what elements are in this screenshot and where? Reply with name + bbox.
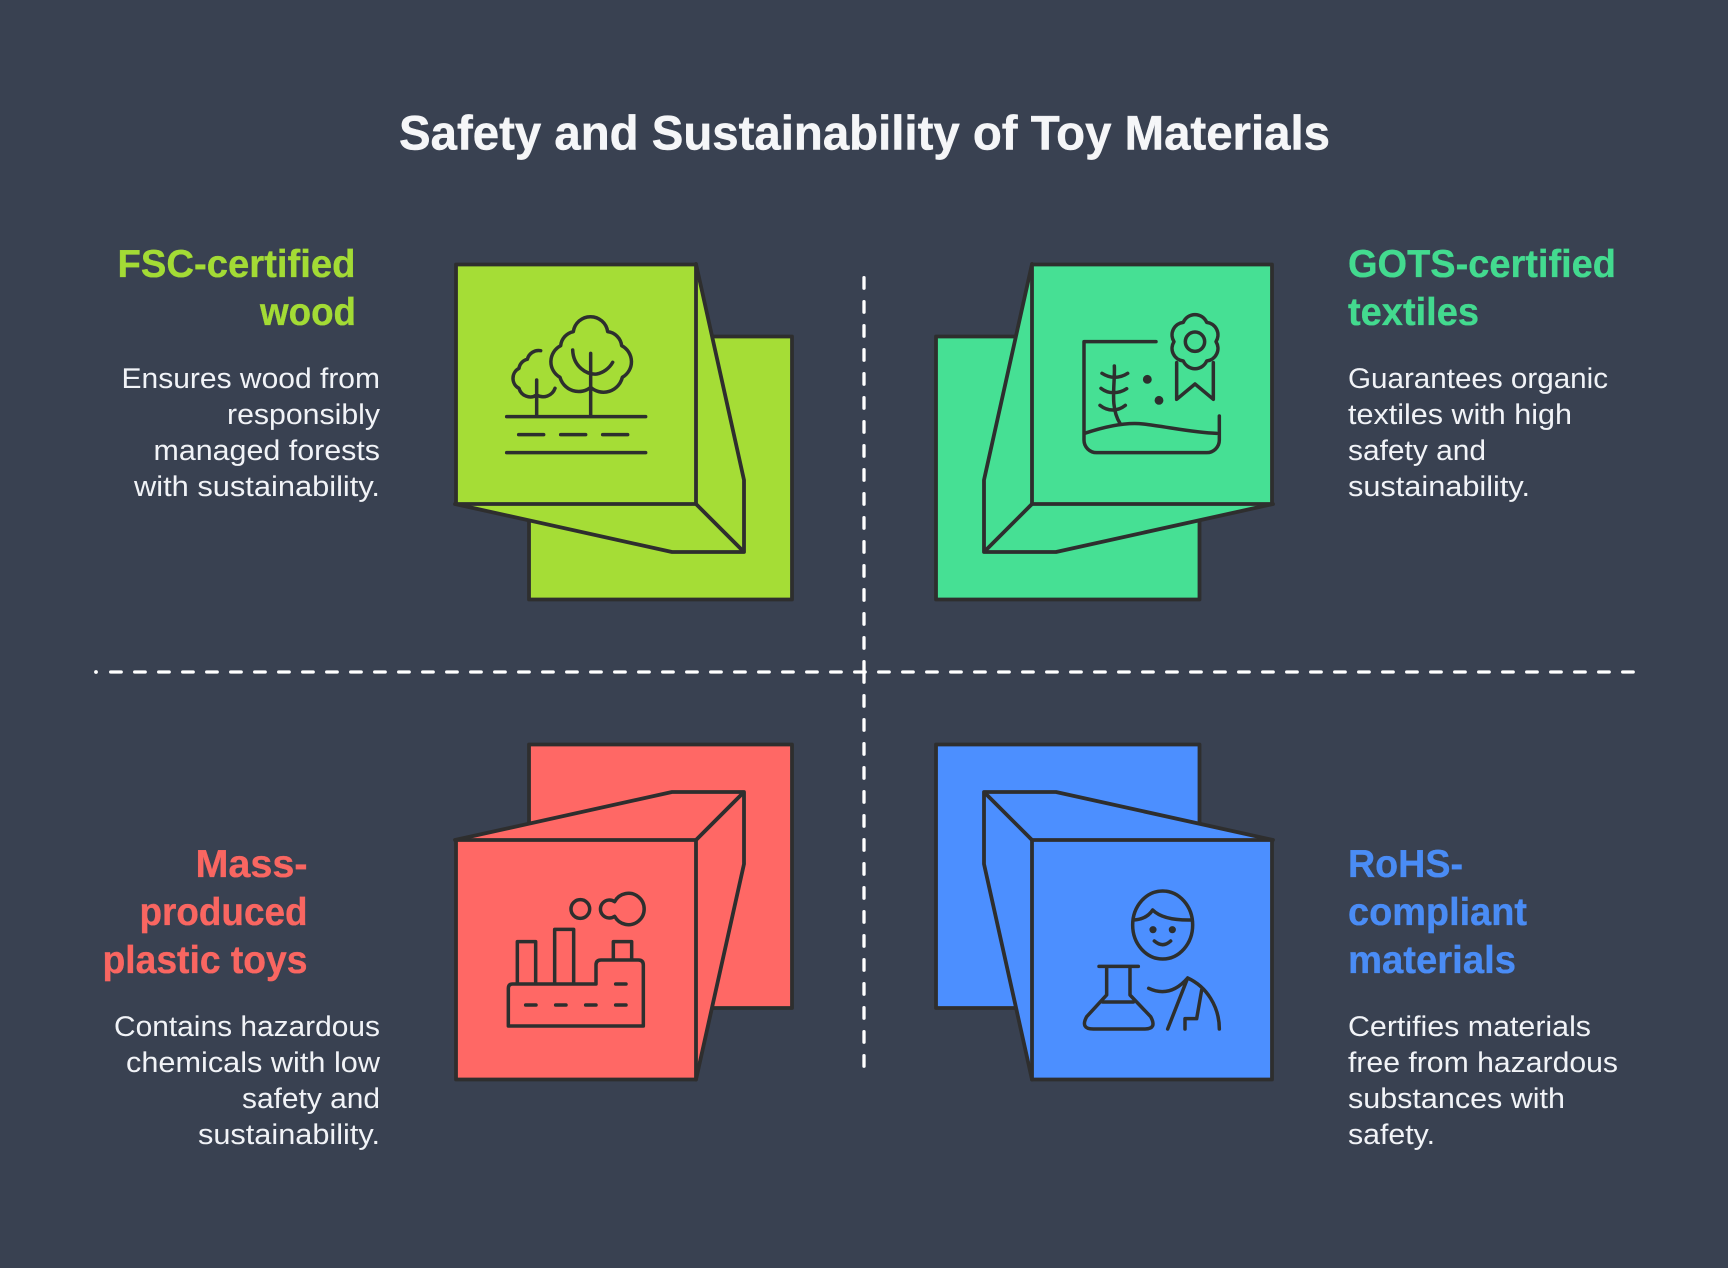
title: Safety and Sustainability of Toy Materials — [399, 106, 1330, 160]
description: RoHS-compliant materials: free from hazardous — [1348, 1047, 1618, 1079]
folded card: green — [936, 264, 1273, 600]
description: RoHS-compliant materials: safety. — [1348, 1119, 1435, 1151]
heading: GOTS-certified textiles: textiles — [1348, 291, 1479, 334]
description: Mass-produced plastic toys: safety and — [242, 1083, 380, 1115]
description: RoHS-compliant materials — [1348, 1011, 1618, 1151]
description: FSC-certified wood: Ensures wood from — [122, 363, 380, 395]
icon: trees on ground — [507, 317, 646, 453]
description: RoHS-compliant materials: substances with — [1348, 1083, 1565, 1115]
heading: Mass-produced plastic toys: produced — [140, 891, 308, 934]
description: Mass-produced plastic toys — [114, 1011, 380, 1151]
description: Mass-produced plastic toys: Contains hazardous — [114, 1011, 380, 1043]
heading: Mass-produced plastic toys — [102, 843, 308, 982]
panel: FSC-certified wood — [118, 243, 792, 600]
description: GOTS-certified textiles: sustainability. — [1348, 471, 1530, 503]
heading: Mass-produced plastic toys: plastic toys — [102, 939, 308, 982]
description: GOTS-certified textiles: safety and — [1348, 435, 1486, 467]
description: FSC-certified wood: responsibly — [227, 399, 381, 431]
icon: scientist with flask — [1084, 891, 1219, 1029]
panel: GOTS-certified textiles — [936, 243, 1616, 600]
folded card: red — [455, 744, 792, 1080]
panel: Mass-produced plastic toys — [102, 744, 792, 1151]
folded card: lime — [455, 264, 792, 600]
icon: factory with smoke — [508, 893, 644, 1026]
description: FSC-certified wood: managed forests — [154, 435, 380, 467]
icon: certified organic landscape — [1084, 315, 1219, 453]
description: FSC-certified wood — [122, 363, 381, 503]
description: RoHS-compliant materials: Certifies materials — [1348, 1011, 1591, 1043]
description: Mass-produced plastic toys: sustainability. — [198, 1119, 380, 1151]
description: FSC-certified wood: with sustainability. — [133, 471, 380, 503]
heading: RoHS-compliant materials — [1348, 843, 1527, 982]
heading: GOTS-certified textiles — [1348, 243, 1616, 334]
heading: FSC-certified wood — [118, 243, 356, 334]
heading: FSC-certified wood: wood — [259, 291, 356, 334]
description: GOTS-certified textiles: textiles with high — [1348, 399, 1572, 431]
folded card: blue — [936, 744, 1273, 1080]
panel: RoHS-compliant materials — [936, 744, 1618, 1151]
description: Mass-produced plastic toys: chemicals with low — [126, 1047, 380, 1079]
description: GOTS-certified textiles — [1348, 363, 1608, 503]
heading: Mass-produced plastic toys: Mass- — [196, 843, 308, 886]
quadrant dividers — [94, 278, 1634, 1068]
description: GOTS-certified textiles: Guarantees organic — [1348, 363, 1608, 395]
heading: RoHS-compliant materials: materials — [1348, 939, 1516, 982]
heading: GOTS-certified textiles: GOTS-certified — [1348, 243, 1616, 286]
heading: RoHS-compliant materials: RoHS- — [1348, 843, 1463, 886]
heading: RoHS-compliant materials: compliant — [1348, 891, 1527, 934]
heading: FSC-certified wood: FSC-certified — [118, 243, 356, 286]
